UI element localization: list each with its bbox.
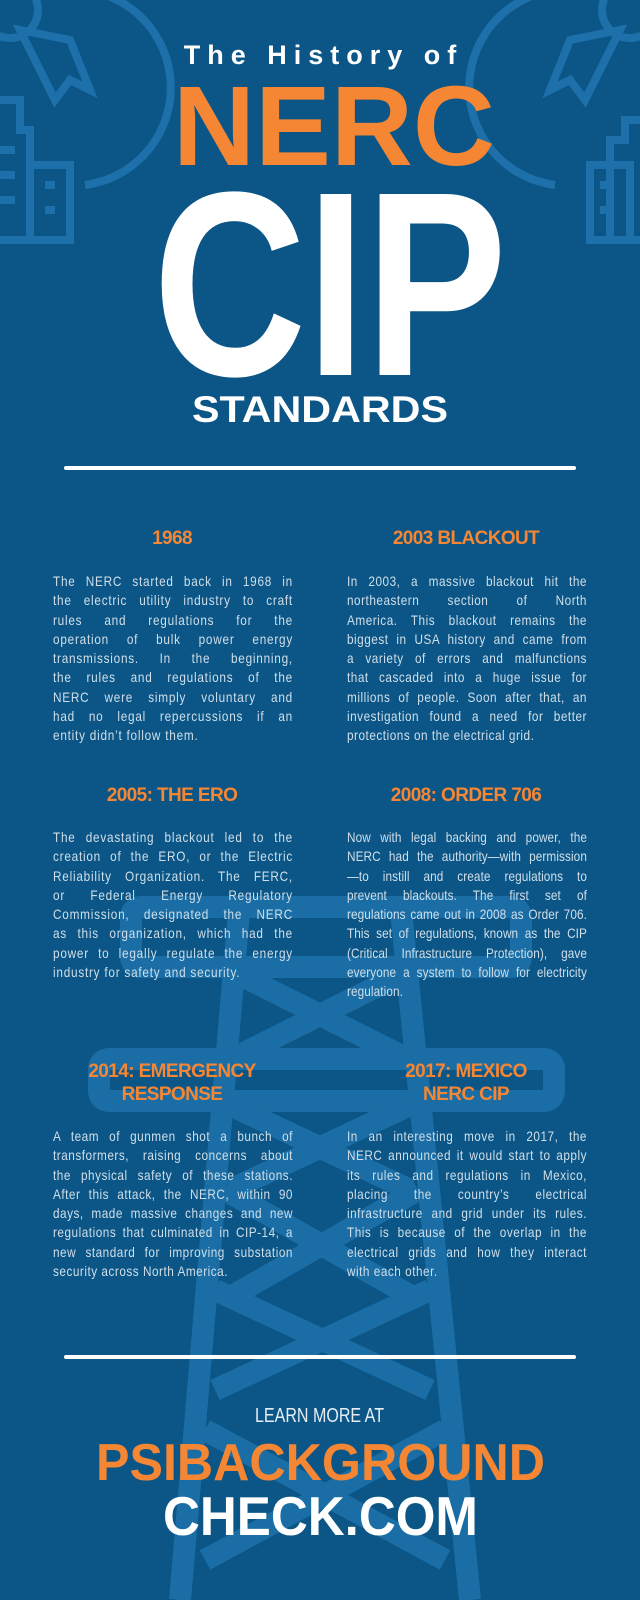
text — [53, 829, 293, 980]
section: 2003 blackout — [347, 528, 587, 743]
text: a variety of errors and malfunctions — [347, 650, 587, 666]
text: the electric utility industry to craft — [53, 592, 293, 608]
text: infrastructure and grid under its rules. — [347, 1205, 587, 1221]
text — [347, 573, 587, 743]
text: NERC had the authority—with permission — [347, 848, 587, 864]
text: transmissions. In the beginning, — [53, 650, 293, 666]
text — [53, 1128, 293, 1279]
text: electrical grids and how they interact — [347, 1244, 587, 1260]
footer call to action — [96, 1405, 545, 1540]
section: 2017 mexico — [347, 1061, 587, 1279]
text: security across North America. — [53, 1263, 228, 1279]
text: northeastern section of North — [347, 592, 587, 608]
text: everyone a system to follow for electricity — [347, 964, 587, 980]
text: rules and regulations for the — [53, 612, 293, 628]
heading: RESPONSE — [122, 1084, 222, 1105]
heading: 2005: THE ERO — [107, 785, 237, 806]
text: In an interesting move in 2017, the — [347, 1128, 587, 1144]
text: operation of bulk power energy — [53, 631, 293, 647]
text: Reliability Organization. The FERC, — [53, 868, 293, 884]
text: protections on the electrical grid. — [347, 727, 534, 743]
heading: 2003 BLACKOUT — [393, 528, 539, 549]
text: —to instill and create regulations to — [347, 868, 587, 884]
text: In 2003, a massive blackout hit the — [347, 573, 587, 589]
text — [347, 1128, 587, 1279]
text — [347, 829, 587, 999]
text: placing the country’s electrical — [347, 1186, 587, 1202]
text: This set of regulations, known as the CIP — [347, 925, 587, 941]
section: 2005 the ERO — [53, 785, 293, 980]
text: prevent blackouts. The first set of — [347, 887, 587, 903]
text: the rules and regulations of the — [53, 669, 293, 685]
text: Now with legal backing and power, the — [347, 829, 587, 845]
heading: 2008: ORDER 706 — [391, 785, 541, 806]
heading — [405, 1061, 527, 1105]
section: 2014 emergency response — [53, 1061, 293, 1279]
heading: 2014: EMERGENCY — [88, 1061, 256, 1082]
text: power to legally regulate the energy — [53, 944, 293, 960]
text: had no legal repercussions if an — [53, 708, 293, 724]
text: new standard for improving substation — [53, 1244, 293, 1260]
text: millions of people. Soon after that, an — [347, 688, 587, 704]
text: that cascaded into a huge issue for — [347, 669, 587, 685]
text: The devastating blackout led to the — [53, 829, 293, 845]
text: (Critical Infrastructure Protection), gave — [347, 944, 587, 960]
text: investigation found a need for better — [347, 708, 587, 724]
heading: 1968 — [152, 528, 192, 549]
text: with each other. — [347, 1263, 438, 1279]
text: or Federal Energy Regulatory — [53, 887, 293, 903]
section: 1968 — [53, 528, 293, 743]
title block — [153, 40, 507, 430]
text: as this organization, which had the — [53, 925, 293, 941]
text: regulations came out in 2008 as Order 706. — [347, 906, 587, 922]
text: its rules and regulations in Mexico, — [347, 1166, 587, 1182]
text: The NERC started back in 1968 in — [53, 573, 293, 589]
text: regulation. — [347, 983, 403, 999]
text: the physical safety of these stations. — [53, 1166, 293, 1182]
text: This is because of the overlap in the — [347, 1224, 587, 1240]
text: Commission, designated the NERC — [53, 906, 293, 922]
text: NERC announced it would start to apply — [347, 1147, 587, 1163]
title: STANDARDS: STANDARDS — [192, 389, 448, 430]
text: A team of gunmen shot a bunch of — [53, 1128, 293, 1144]
text: creation of the ERO, or the Electric — [53, 848, 293, 864]
heading: NERC CIP — [423, 1084, 509, 1105]
text: NERC were simply voluntary and — [53, 688, 293, 704]
text: After this attack, the NERC, within 90 — [53, 1186, 293, 1202]
section: 2008 order 706 — [347, 785, 587, 999]
text: biggest in USA history and came from — [347, 631, 587, 647]
text: regulations that culminated in CIP-14, a — [53, 1224, 293, 1240]
text — [53, 573, 293, 743]
heading — [88, 1061, 256, 1105]
title: The History of: The History of — [184, 40, 463, 70]
text: America. This blackout remains the — [347, 612, 587, 628]
heading: 2017: MEXICO — [405, 1061, 527, 1082]
text: entity didn’t follow them. — [53, 727, 199, 743]
text: days, made massive changes and new — [53, 1205, 293, 1221]
text: industry for safety and security. — [53, 964, 240, 980]
text: transformers, raising concerns about — [53, 1147, 293, 1163]
